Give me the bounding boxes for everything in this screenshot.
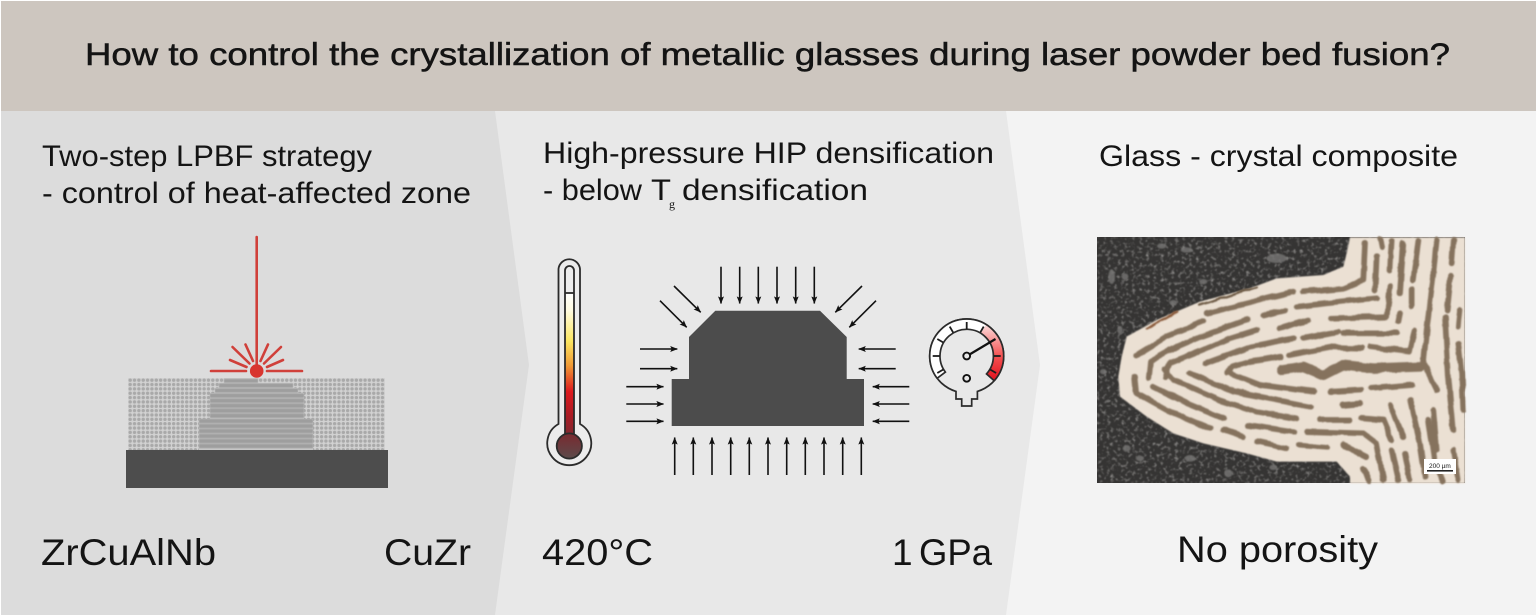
micrograph: glass-crystal composite	[1097, 237, 1465, 483]
title: How to control the crystallization of metallic glasses during laser powder bed fusion?	[85, 36, 1450, 72]
powder bed	[128, 378, 385, 450]
panel: HIP densification background	[1, 111, 1040, 615]
speckles in matrix	[1100, 243, 1287, 477]
laser beam and sparks	[211, 237, 302, 371]
melted layers	[199, 378, 313, 450]
heading: high-pressure HIP densification: g	[669, 197, 675, 211]
panel: LPBF strategy background	[1, 111, 529, 615]
icon: pressure gauge	[930, 319, 1004, 406]
heading: high-pressure HIP densification: densification	[682, 174, 868, 207]
label: CuZr: CuZr	[384, 532, 471, 573]
icon: thermometer	[547, 259, 591, 465]
substrate	[126, 450, 388, 488]
heading: high-pressure HIP densification	[543, 137, 994, 211]
label: ZrCuAlNb: ZrCuAlNb	[41, 532, 216, 573]
heading: two-step LPBF strategy: Two-step LPBF strategy	[42, 140, 372, 173]
heading: high-pressure HIP densification: High-pressure HIP densification	[543, 137, 994, 170]
heading: glass-crystal composite: Glass - crystal composite	[1099, 140, 1458, 173]
label: 1 GPa: GPa	[919, 532, 992, 573]
scale bar: 200 µm	[1429, 463, 1451, 470]
melted composite region	[1118, 237, 1465, 483]
label: 420°C: 420°C	[542, 532, 653, 573]
heading: high-pressure HIP densification: - below	[543, 174, 643, 207]
pressure arrows	[626, 267, 909, 475]
scale bar	[1424, 459, 1456, 474]
crystalline lamellae	[1135, 238, 1463, 482]
heading: two-step LPBF strategy	[42, 140, 471, 210]
heading: high-pressure HIP densification: T	[651, 174, 671, 207]
label: 1 GPa: 1	[892, 532, 913, 573]
header band	[1, 1, 1536, 111]
HIP part body	[672, 311, 864, 426]
illustration: laser powder bed	[126, 237, 388, 488]
label: no porosity: No porosity	[1177, 529, 1379, 570]
heading: two-step LPBF strategy: - control of heat-affected zone	[42, 177, 471, 210]
